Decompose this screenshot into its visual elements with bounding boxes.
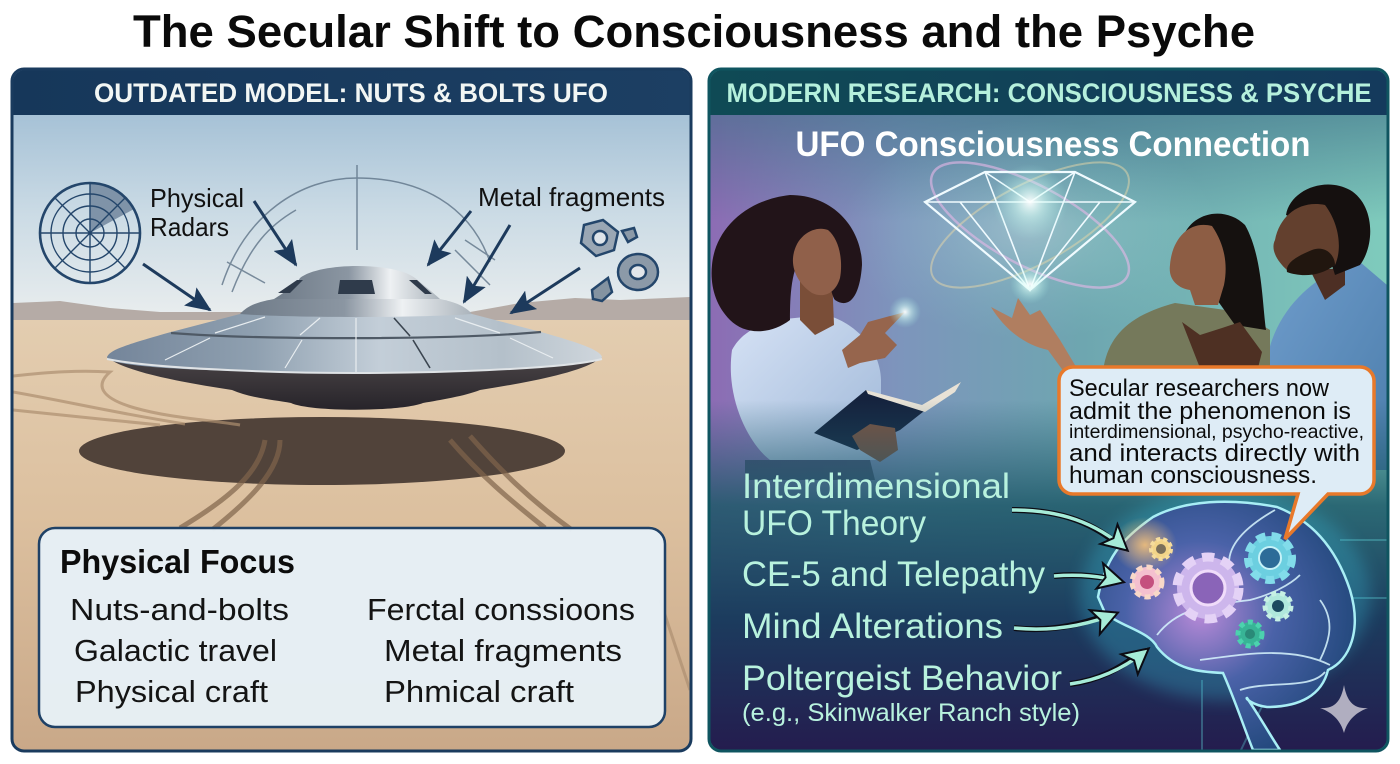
callout: secular researchers: and interacts directly with <box>1069 440 1360 467</box>
callout heading: Physical Focus <box>60 543 295 580</box>
callout: physical focus <box>39 528 665 727</box>
holding hand <box>852 424 898 462</box>
callout: secular researchers <box>1059 367 1374 539</box>
icon: radar <box>40 183 140 283</box>
icon: glowing crystal <box>914 138 1146 312</box>
icon: metal fragments <box>581 220 658 301</box>
icon: flying saucer <box>107 266 602 410</box>
brain <box>1080 490 1370 750</box>
list: research topics: UFO Theory <box>742 504 926 543</box>
list: research topics <box>742 467 1080 727</box>
header: outdated <box>13 70 690 115</box>
person: second woman <box>1104 214 1270 370</box>
rim <box>240 299 472 317</box>
callout: secular researchers: interdimensional, psycho-reactive, <box>1069 422 1364 443</box>
header text: OUTDATED MODEL: NUTS & BOLTS UFO <box>94 78 608 108</box>
gears <box>1177 557 1239 619</box>
hull <box>107 314 602 372</box>
callout: secular researchers: admit the phenomenon is <box>1069 398 1351 425</box>
windows <box>278 280 432 294</box>
left list: Physical craft <box>75 674 268 709</box>
tire tracks <box>13 371 690 690</box>
header text: MODERN RESEARCH: CONSCIOUSNESS & PSYCHE <box>726 78 1372 108</box>
header: modern <box>710 70 1387 115</box>
person: woman with book <box>712 195 961 480</box>
panel: outdated model <box>12 69 691 752</box>
dome <box>274 266 440 299</box>
icon: sparkle <box>1320 685 1368 733</box>
right list: Phmical craft <box>384 674 574 709</box>
open hand and arm <box>991 298 1078 372</box>
book <box>814 382 961 450</box>
underside <box>107 357 602 410</box>
arrows <box>143 201 580 313</box>
callout: secular researchers: Secular researchers now <box>1069 375 1330 402</box>
hand <box>1182 322 1262 368</box>
dark lower area <box>710 400 1387 752</box>
label: physical radars: Radars <box>150 212 229 242</box>
title: The Secular Shift to Consciousness and the Psyche <box>133 6 1255 57</box>
arrows: topics to brain <box>1012 510 1148 684</box>
list: research topics: Interdimensional <box>742 467 1010 506</box>
right list: Metal fragments <box>384 633 622 668</box>
callout: secular researchers: human consciousness. <box>1069 462 1317 489</box>
rays <box>1202 540 1387 752</box>
person: man <box>1266 184 1387 470</box>
distant mountains <box>13 297 690 322</box>
list: research topics: Poltergeist Behavior <box>742 659 1062 698</box>
left list: Galactic travel <box>74 633 277 668</box>
list: research topics: CE-5 and Telepathy <box>742 555 1045 594</box>
subheading: UFO Consciousness Connection <box>796 125 1310 164</box>
left list: Nuts-and-bolts <box>70 592 289 627</box>
sky <box>13 112 690 317</box>
right list: Ferctal conssioons <box>367 592 635 627</box>
label: metal fragments: Metal fragments <box>478 182 665 212</box>
sulci <box>1157 510 1330 690</box>
desert ground <box>13 320 690 752</box>
pointing hand <box>842 312 905 368</box>
label: physical radars: Physical <box>150 183 244 213</box>
list: research topics: Mind Alterations <box>742 607 1003 646</box>
panel: modern research <box>709 69 1388 752</box>
ground shadow <box>79 417 565 485</box>
scan arcs <box>222 165 495 292</box>
list: research topics: (e.g., Skinwalker Ranch style) <box>742 699 1080 727</box>
